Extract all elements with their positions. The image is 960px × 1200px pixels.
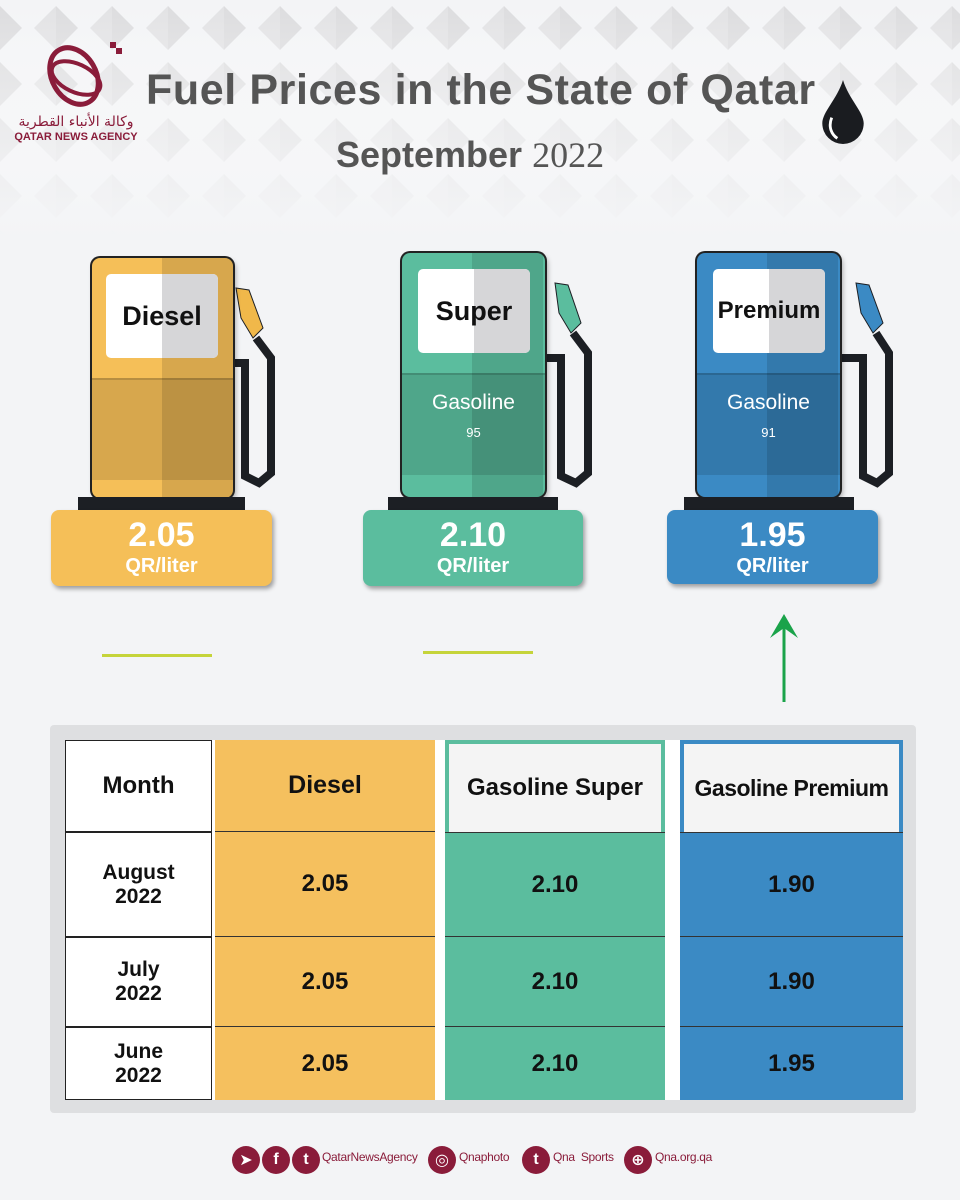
icon: facebook [262,1146,290,1174]
pump: super: Super [436,296,512,326]
text: sports: Qna Sports [553,1150,614,1164]
logo: وكالة الأنباء القطرية [18,114,134,130]
icon: oil drop [822,80,864,144]
pump: super: 2.10 [440,516,506,554]
icon: twitter sports [522,1146,550,1174]
table: Month [103,772,174,799]
pump: premium: QR/liter [736,555,809,577]
column: diesel: 2.05 [302,870,348,897]
logo: QATAR NEWS AGENCY [14,131,138,143]
icon: twitter [292,1146,320,1174]
column: super [445,740,665,1100]
pump: premium: Gasoline [727,391,810,414]
icon: facebook: f [273,1151,279,1168]
column: diesel: 2.05 [302,1050,348,1076]
column: premium: 1.95 [768,1050,815,1076]
icon: instagram: ◎ [435,1152,449,1169]
pump: premium [666,251,893,590]
text: handle: QatarNewsAgency [322,1150,418,1164]
table: July [117,958,160,981]
column: super: Gasoline Super [467,774,643,801]
pump: diesel: 2.05 [128,516,195,554]
dash: super unchanged [423,651,533,654]
column: super: 2.10 [532,1050,578,1076]
pump: super [362,251,592,592]
icon: instagram [428,1146,456,1174]
table panel [50,725,916,1113]
column: super: 2.10 [532,870,578,898]
pump: super: QR/liter [437,555,509,577]
column: diesel [215,740,435,1100]
pump: super: 95 [466,425,481,440]
icon: twitter sports: t [533,1151,539,1168]
pump: super: Gasoline [432,391,515,414]
table [65,740,903,1100]
pump: diesel: Diesel [122,300,202,330]
column: premium [680,740,903,1100]
column: premium: Gasoline Premium [695,774,888,800]
icon: telegram [232,1146,260,1174]
icon: globe [624,1146,652,1174]
icon: globe: ⊕ [631,1152,645,1169]
table: 2022 [115,1064,162,1086]
pump: premium: 1.95 [739,516,806,554]
table: 2022 [115,982,162,1005]
dash: diesel unchanged [102,654,212,657]
footer [232,1146,712,1174]
column: super: 2.10 [532,968,578,994]
table: June [114,1040,163,1062]
pump: diesel [50,256,277,592]
table: August [102,860,175,884]
text: website: Qna.org.qa [655,1150,712,1164]
table: 2022 [115,884,162,908]
title: Fuel Prices in the State of Qatar [146,66,816,114]
icon: twitter: t [303,1151,309,1168]
column: diesel: Diesel [288,771,362,799]
icon: telegram: ➤ [239,1152,253,1169]
column: premium: 1.90 [768,870,815,898]
logo [14,42,138,143]
text: qnaphoto: Qnaphoto [459,1150,509,1164]
column: diesel: 2.05 [302,968,348,994]
column: premium: 1.90 [768,968,815,994]
pump: premium: Premium [718,297,820,324]
pump: premium: 91 [761,425,776,440]
pump: diesel: QR/liter [125,555,198,577]
arrow: premium up [770,614,798,702]
background pattern [0,6,960,138]
subtitle: September 2022 [336,134,604,175]
